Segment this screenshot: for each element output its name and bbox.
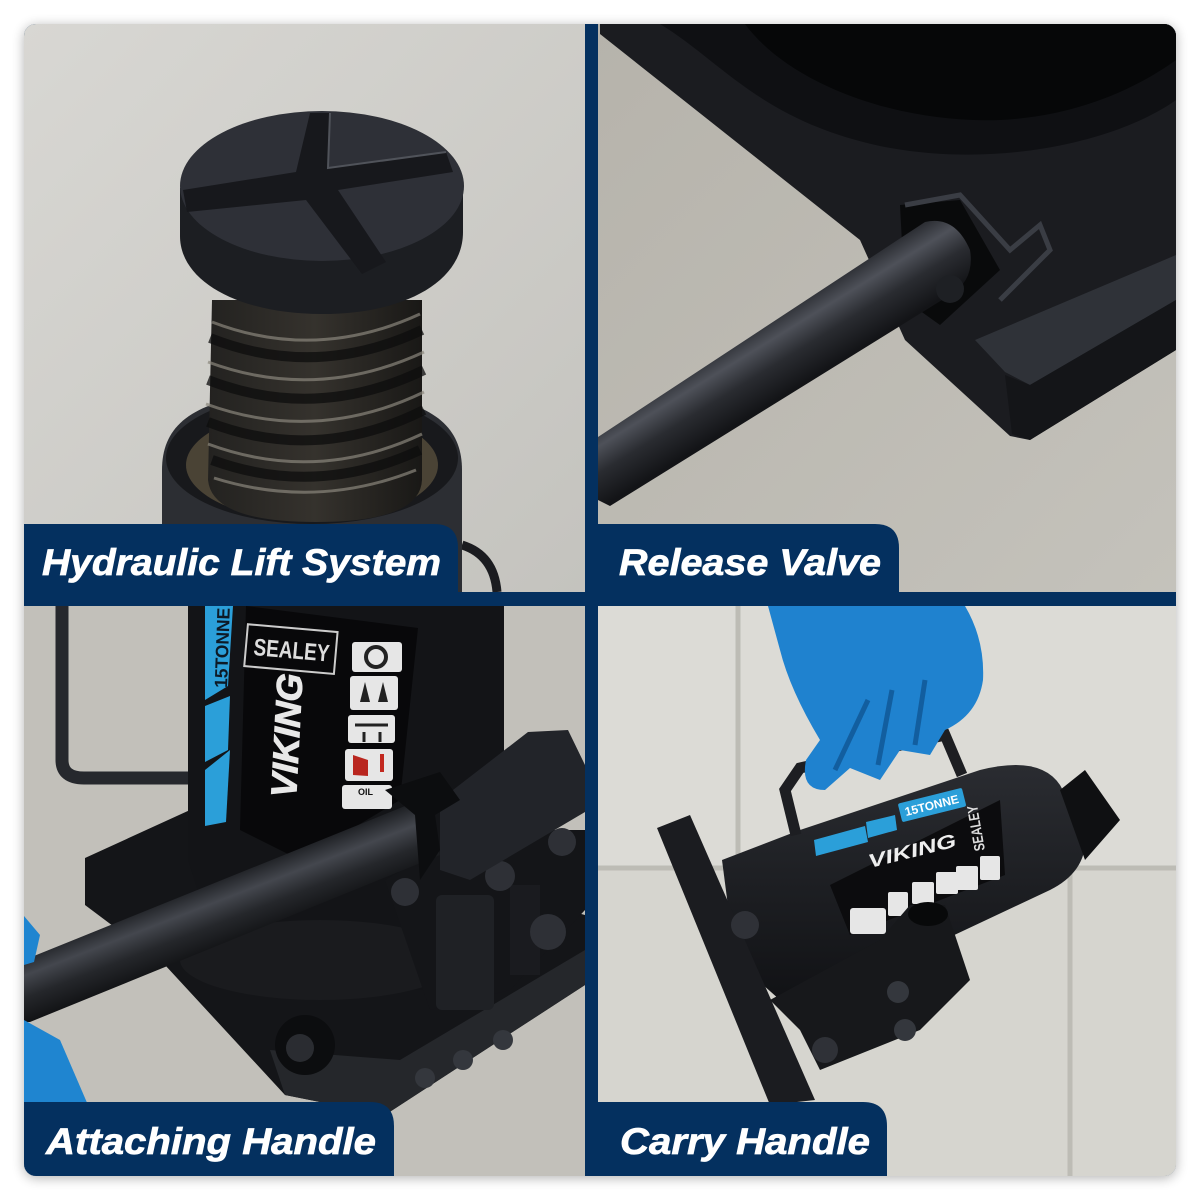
- base plate: [85, 810, 585, 1115]
- screw head: [180, 111, 464, 314]
- handle bar: [598, 221, 971, 506]
- vertical divider: [585, 24, 598, 1176]
- jack body horizontal: [722, 765, 1120, 1000]
- decal: [814, 788, 1005, 935]
- caption tab: attaching handle: Attaching Handle: [45, 1121, 376, 1162]
- caption tab: attaching handle: [24, 1102, 394, 1176]
- jack collar: [162, 406, 462, 592]
- panel: release valve: [598, 24, 1176, 592]
- lever head: [440, 730, 585, 880]
- caption tab: carry handle: Carry Handle: [620, 1121, 870, 1162]
- logo: sealey: [244, 624, 338, 674]
- label: black decal: [240, 606, 418, 860]
- caption tab: release valve: [598, 524, 899, 592]
- safety icons: OIL: [358, 787, 374, 797]
- handle bar: [24, 772, 460, 1022]
- logo: viking: VIKING: [263, 672, 310, 798]
- decal: VIKING: [866, 831, 959, 873]
- pump mechanism: [385, 828, 585, 1010]
- label: capacity strip: [205, 606, 234, 826]
- caption tab: carry handle: [590, 1102, 887, 1176]
- blue glove: [768, 606, 983, 790]
- horizontal divider: [24, 592, 1176, 606]
- jack body: [188, 606, 504, 854]
- decal: 15TONNE: [903, 792, 960, 819]
- safety icons: [342, 642, 402, 809]
- caption tab: hydraulic lift system: Hydraulic Lift System: [42, 542, 441, 583]
- carry handle: [62, 606, 190, 778]
- label: capacity strip: 15TONNE: [211, 607, 234, 688]
- carry handle loop: [785, 735, 962, 835]
- threaded screw: [206, 300, 424, 522]
- jack base: [600, 24, 1176, 440]
- caption tab: release valve: Release Valve: [619, 542, 881, 583]
- caption tab: hydraulic lift system: [24, 524, 458, 592]
- panel: carry handle: [598, 606, 1176, 1176]
- base plate: [657, 815, 815, 1105]
- panel: attaching handle: [24, 606, 585, 1176]
- logo: sealey: SEALEY: [252, 634, 331, 668]
- carry handle ring behind: [462, 545, 497, 592]
- glove fragment: [24, 916, 88, 1105]
- decal: SEALEY: [964, 804, 989, 852]
- pump assembly: [731, 902, 970, 1070]
- panel: hydraulic lift system: [24, 24, 585, 600]
